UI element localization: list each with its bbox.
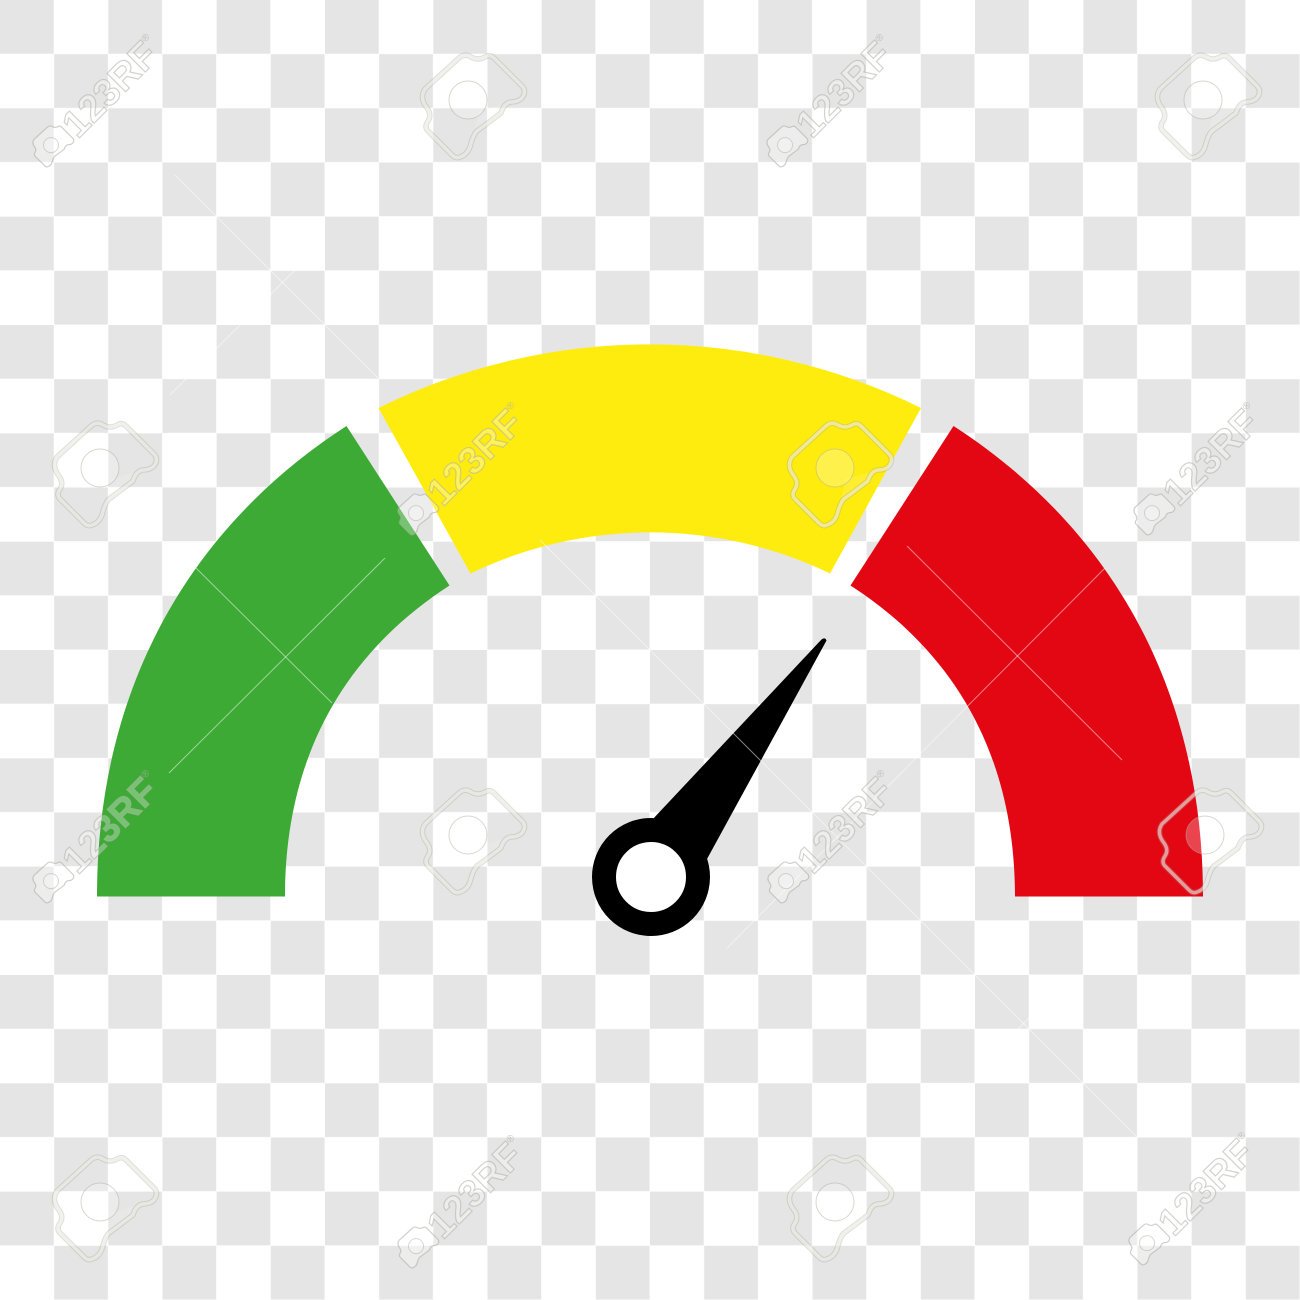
- watermark: 123RF logo 1: 123RF: [55, 34, 167, 146]
- watermark: 123RF logo 5: [12, 759, 177, 923]
- watermark: 123RF logo 7: [377, 1124, 542, 1288]
- needle hub ring: [604, 830, 698, 924]
- segment: red: [850, 426, 1203, 896]
- watermark: egg camera icon 6: [1159, 790, 1262, 893]
- watermark: faint diagonal lines: [169, 175, 1137, 1137]
- watermark: egg camera icon 4: [789, 423, 892, 526]
- watermark: egg camera icon 3: [54, 423, 156, 526]
- watermark: 123RF logo 6: ®: [874, 767, 888, 781]
- watermark: 123RF logo 4: 123RF: [1156, 402, 1268, 514]
- watermark: 123RF logo 3: [377, 391, 542, 555]
- segment: yellow: [378, 344, 921, 574]
- watermark: egg camera icon 1: [422, 55, 524, 158]
- watermark: 123RF logo 3: ®: [504, 399, 518, 413]
- needle blade: [652, 638, 826, 880]
- watermark: 123RF logo 8: 123RF: [1151, 1132, 1263, 1244]
- watermark: egg camera icon 5: [422, 790, 524, 893]
- watermark: 123RF logo 7: ®: [504, 1132, 518, 1146]
- watermark: 123RF logo 2: 123RF: [789, 34, 901, 146]
- watermark: 123RF logo 1: [12, 23, 177, 187]
- gauge: three coloured arc segments: [97, 344, 1203, 896]
- watermark: 123RF logo 1: ®: [139, 31, 153, 45]
- watermark: 123RF logo 6: 123RF: [790, 770, 902, 882]
- watermark: 123RF logo 4: ®: [1240, 399, 1254, 413]
- watermark: 123RF logo 2: [746, 23, 911, 187]
- segment: green: [97, 426, 450, 896]
- watermark: 123RF logo 8: ®: [1235, 1129, 1249, 1143]
- needle: black pointer with ring hub: [604, 638, 826, 924]
- watermark: 123RF logo 6: [747, 759, 912, 923]
- watermark: 123RF logo 5: 123RF: [55, 770, 167, 882]
- watermark: 123RF logo 7: 123RF: [420, 1135, 532, 1247]
- watermark: egg camera icon 8: [789, 1157, 892, 1260]
- watermark: egg camera icon 2: [1157, 55, 1260, 158]
- watermark: 123RF logo 5: ®: [139, 767, 153, 781]
- watermark: 123RF logo 3: 123RF: [420, 402, 532, 514]
- watermark: 123RF logo 4: [1113, 391, 1278, 555]
- watermark: egg camera icon 7: [54, 1157, 156, 1260]
- watermark: 123RF logo 2: ®: [873, 31, 887, 45]
- watermark: 123RF logo 8: [1108, 1121, 1273, 1285]
